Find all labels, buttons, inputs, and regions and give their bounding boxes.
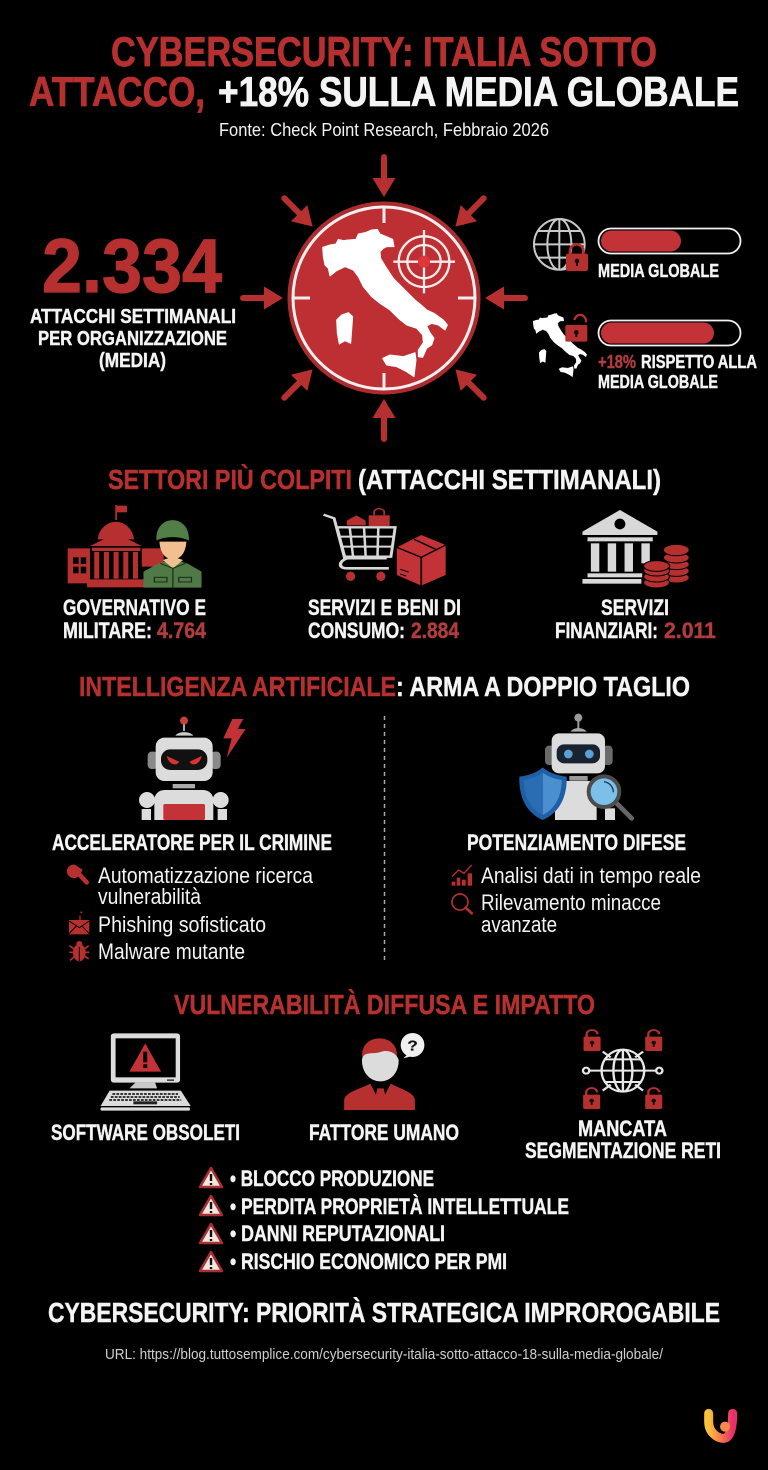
label: SERVIZI [601, 595, 669, 620]
label: SEGMENTAZIONE RETI [525, 1138, 721, 1163]
label: MILITARE: [63, 618, 152, 643]
list: defence items: Analisi dati in tempo reale [481, 863, 701, 888]
panel: government and military [63, 505, 207, 643]
list: impacts [200, 1166, 569, 1274]
bar: Italy [598, 320, 740, 346]
icon: network globe with locks [583, 1030, 662, 1109]
list: crime items: Malware mutante [98, 939, 245, 964]
bar: global average [598, 228, 740, 254]
icon: arrows pointing at Italy [240, 154, 528, 442]
label: MANCATA [578, 1116, 667, 1141]
list: crime items: vulnerabilità [98, 884, 202, 909]
icon: evil robot [139, 717, 246, 820]
label [555, 595, 716, 643]
heading: AI: : ARMA A DOPPIO TAGLIO [396, 671, 690, 702]
label: CONSUMO: [308, 618, 405, 643]
label: GOVERNATIVO E [63, 595, 206, 620]
icon: logo [709, 1413, 733, 1438]
label: 4.764 [157, 618, 207, 643]
label: +18%: MEDIA GLOBALE [598, 372, 718, 392]
icon: person with question mark: ? [407, 1038, 418, 1054]
panel: strengthened defences [452, 714, 701, 937]
big stat: weekly attacks: 2.334 [42, 224, 222, 309]
icon: warning triangle [200, 1168, 222, 1187]
label [63, 595, 207, 643]
icon: chart [452, 865, 472, 886]
icon: wrench [67, 865, 87, 882]
icon: magnifier [452, 894, 472, 913]
icon: Italy in crosshair target [288, 202, 480, 394]
list: defence items: avanzate [481, 912, 557, 937]
icon: cart and box [324, 509, 446, 586]
heading: AI: INTELLIGENZA ARTIFICIALE [79, 671, 396, 702]
heading: sectors: SETTORI PIÙ COLPITI [108, 464, 352, 495]
label: SOFTWARE OBSOLETI [51, 1120, 240, 1145]
panel: missing network segmentation [525, 1030, 721, 1163]
list: crime items: Automatizzazione ricerca [98, 863, 314, 888]
icon: person with question mark [344, 1033, 424, 1110]
icon: old computer with warning [101, 1033, 191, 1111]
label: FINANZIARI: [555, 618, 658, 643]
title: CYBERSECURITY: ITALIA SOTTO [111, 28, 657, 75]
panel: global average comparison [534, 219, 740, 281]
icon: phishing envelope [69, 911, 89, 934]
heading: AI [79, 671, 690, 702]
list: impacts: • BLOCCO PRODUZIONE [230, 1166, 434, 1191]
icon: bank and coins [582, 510, 689, 588]
icon: defence robot [519, 714, 632, 820]
list: defence items [452, 863, 701, 937]
big stat: weekly attacks [30, 224, 236, 372]
label [525, 1116, 721, 1163]
label [308, 595, 461, 643]
label: SERVIZI E BENI DI [308, 595, 461, 620]
subheading: POTENZIAMENTO DIFESE [467, 830, 686, 855]
panel: financial services [555, 510, 716, 643]
panel: human factor [309, 1033, 459, 1145]
list: impacts: • DANNI REPUTAZIONALI [230, 1221, 445, 1246]
label: +18% [598, 352, 757, 392]
list: impacts: • RISCHIO ECONOMICO PER PMI [230, 1249, 507, 1274]
panel: Italy comparison [533, 313, 757, 392]
heading: sectors: (ATTACCHI SETTIMANALI) [358, 464, 661, 495]
label: media globale: MEDIA GLOBALE [598, 261, 719, 281]
icon: warning triangle [200, 1252, 222, 1271]
icon: warning triangle [200, 1196, 222, 1215]
big stat: weekly attacks: (MEDIA) [99, 350, 166, 372]
source URL: URL: https://blog.tuttosemplice.com/cybersecurity-italia-sotto-attacco-18-sulla-media-globale/ [105, 1346, 664, 1363]
panel: consumer goods [308, 509, 461, 643]
title [29, 28, 739, 115]
heading: vulnerability: VULNERABILITÀ DIFFUSA E IMPATTO [174, 989, 595, 1020]
icon: warning triangle [200, 1224, 222, 1243]
icon: Italy with open lock [533, 313, 587, 377]
big stat: weekly attacks: PER ORGANIZZAZIONE [38, 328, 227, 350]
panel: accelerator for crime [52, 717, 332, 964]
subheading: ACCELERATORE PER IL CRIMINE [52, 830, 332, 855]
title: ATTACCO, [29, 68, 205, 115]
list: crime items [67, 863, 314, 964]
label: +18%: +18% [598, 352, 636, 372]
heading: sectors [108, 464, 661, 495]
icon: parliament and soldier [68, 505, 202, 588]
big stat: weekly attacks: ATTACCHI SETTIMANALI [30, 306, 236, 328]
label: 2.884 [411, 618, 460, 643]
list: impacts: • PERDITA PROPRIETÀ INTELLETTUALE [230, 1194, 569, 1219]
list: crime items: Phishing sofisticato [98, 912, 266, 937]
label: FATTORE UMANO [309, 1120, 459, 1145]
icon: globe with lock [534, 219, 588, 271]
panel: obsolete software [51, 1033, 240, 1145]
list: defence items: Rilevamento minacce [481, 890, 661, 915]
label: 2.011 [664, 618, 716, 643]
icon: bug [69, 941, 89, 961]
source line: Fonte: Check Point Research, Febbraio 2026 [219, 120, 549, 140]
